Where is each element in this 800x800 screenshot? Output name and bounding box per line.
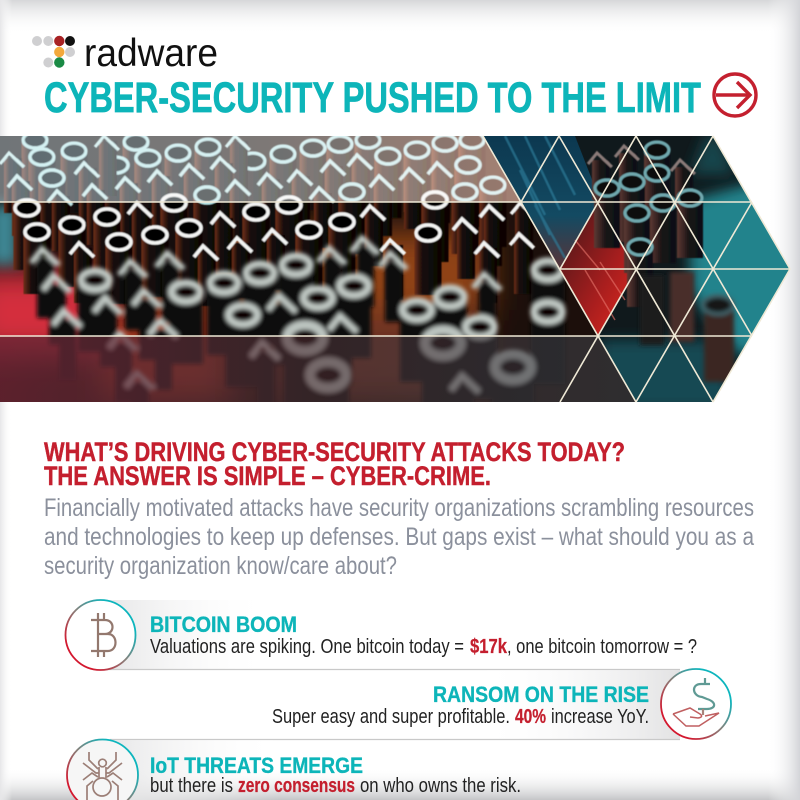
icon: bitcoin	[66, 600, 136, 670]
hero image banner: binary pillars with triangle grid	[0, 136, 790, 402]
far pillars (sharp)	[0, 132, 535, 306]
panel: ransom on the rise	[110, 669, 731, 740]
red circuit panel	[560, 210, 628, 334]
dark teal pillars	[588, 142, 703, 307]
panel: bitcoin boom	[66, 600, 697, 670]
near pillars (blurred)	[26, 232, 569, 402]
IoT text: on who owns the risk.	[360, 774, 521, 797]
IoT text: zero consensus	[238, 774, 355, 797]
ransom text: RANSOM ON THE RISE	[433, 682, 649, 707]
bitcoin text: Valuations are spiking. One bitcoin today =	[150, 635, 464, 658]
panel: IoT threats emerge	[67, 740, 521, 800]
icon: spider	[67, 740, 138, 800]
logo: radware: radware	[84, 32, 218, 75]
blue circuit panel	[483, 136, 600, 269]
heading: WHAT’S DRIVING CYBER-SECURITY ATTACKS TODAY?	[44, 437, 625, 467]
bitcoin text	[150, 612, 697, 658]
ransom text: increase YoY.	[551, 705, 649, 728]
logo: radware	[32, 32, 218, 75]
icon: arrow in circle	[714, 74, 756, 116]
photo tint bands	[0, 136, 560, 202]
IoT text	[150, 753, 521, 797]
intro text block: security organization know/care about?	[44, 552, 397, 580]
IoT text: but there is	[150, 774, 233, 797]
bitcoin text: BITCOIN BOOM	[150, 612, 297, 637]
heading: THE ANSWER IS SIMPLE – CYBER-CRIME.	[44, 461, 491, 491]
ransom text: Super easy and super profitable.	[272, 705, 510, 728]
ransom text: 40%	[515, 705, 546, 728]
icon: hand with dollar	[661, 669, 731, 739]
bitcoin text: $17k	[470, 635, 507, 658]
right image inside the hexagon arrow	[484, 136, 789, 402]
bitcoin text: , one bitcoin tomorrow = ?	[507, 635, 697, 658]
IoT text: IoT THREATS EMERGE	[150, 753, 363, 778]
triangle grid lines	[0, 136, 790, 402]
ransom text	[272, 682, 649, 728]
photo colour washes	[0, 230, 490, 400]
heading	[44, 437, 625, 491]
intro text block	[44, 494, 754, 580]
teal wash	[680, 178, 789, 360]
